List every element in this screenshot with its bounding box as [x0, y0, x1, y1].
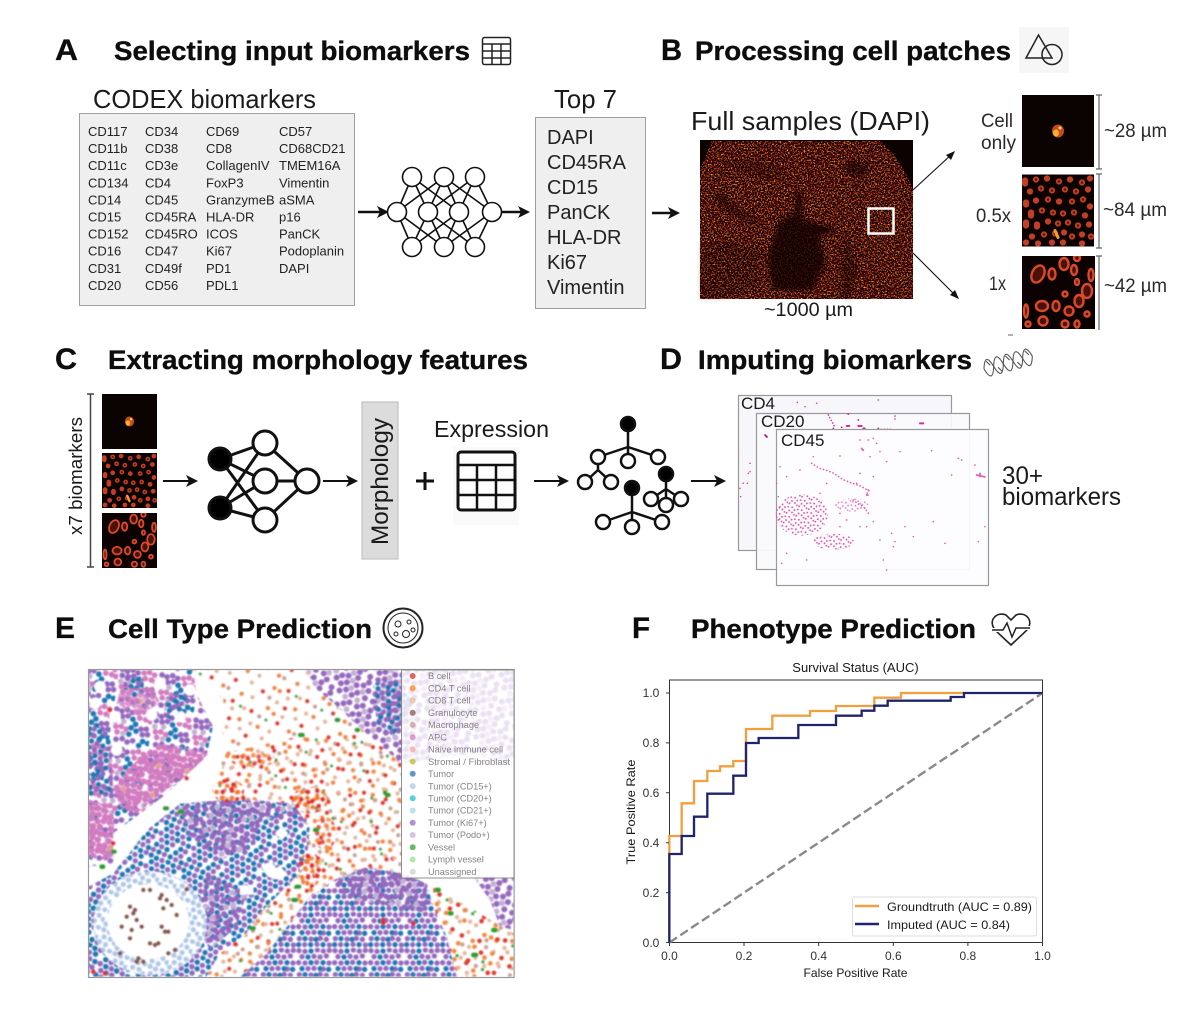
label 30+ biomarkers: biomarkers	[1002, 483, 1121, 511]
zoom arrow down	[913, 253, 959, 299]
label cell only	[981, 111, 1016, 154]
label x7 biomarkers: x7 biomarkers	[66, 417, 86, 535]
cell type legend: Tumor	[428, 769, 454, 779]
cell type legend: Naive immune cell	[428, 745, 503, 755]
panel B: processing cell patches	[661, 27, 1167, 335]
scale label 1000 um: ~1000 µm	[764, 300, 853, 321]
Top 7 biomarker list box: CD45RA	[547, 152, 627, 174]
icon: neural network	[388, 168, 502, 256]
CODEX biomarker list box: GranzymeB	[206, 192, 275, 207]
diagonal reference line	[670, 693, 1042, 942]
CODEX biomarker list box: CD68CD21	[279, 141, 345, 156]
CODEX biomarker list box: CD4	[145, 175, 171, 190]
heading E: Cell Type Prediction	[108, 614, 372, 644]
Top 7 biomarker list box: Vimentin	[547, 277, 624, 299]
arrow to imputed maps	[691, 475, 726, 487]
Top 7 title: Top 7	[554, 84, 617, 114]
morphology box	[362, 402, 398, 559]
CODEX biomarkers title: CODEX biomarkers	[93, 84, 316, 114]
map layer CD4: CD4	[741, 394, 775, 413]
CODEX biomarker list box: CD69	[206, 124, 239, 139]
x axis ticks and labels: 0.6	[885, 949, 902, 963]
CODEX biomarker list box: CD34	[145, 124, 178, 139]
cell type legend	[402, 670, 514, 878]
panel letter A: A	[55, 34, 78, 67]
CODEX biomarker list box: CD152	[88, 227, 128, 242]
cell type legend: Tumor (Podo+)	[428, 830, 490, 840]
cell type legend: Tumor (CD20+)	[428, 794, 492, 804]
scale brackets	[1096, 95, 1102, 330]
scale label 42 um: ~42 µm	[1104, 276, 1167, 297]
CODEX biomarker list box: HLA-DR	[206, 210, 254, 224]
CODEX biomarker list box	[80, 114, 354, 306]
chart legend: Imputed (AUC = 0.84)	[887, 918, 1010, 932]
CODEX biomarker list box: CD49f	[145, 261, 182, 276]
icon: DNA helix	[982, 348, 1034, 377]
x axis ticks and labels: 1.0	[1034, 949, 1051, 963]
CODEX biomarker list box: PD1	[206, 261, 231, 276]
heading A: Selecting input biomarkers	[114, 36, 470, 66]
map layer CD20: CD20	[761, 412, 804, 431]
CODEX biomarker list box: CD20	[88, 278, 121, 293]
CODEX biomarker list box: CD14	[88, 192, 121, 207]
x axis ticks and labels: 0.0	[661, 949, 678, 963]
CODEX biomarker list box: Vimentin	[279, 175, 329, 190]
Top 7 biomarker list box: CD15	[547, 177, 598, 199]
morphology box: Morphology	[367, 418, 394, 545]
CODEX biomarker list box: Ki67	[206, 244, 232, 259]
y axis ticks and labels: 0.4	[643, 836, 660, 850]
Top 7 biomarker list box: PanCK	[547, 202, 611, 224]
arrow to panel B	[652, 207, 680, 219]
arrow to network	[163, 475, 198, 487]
y axis ticks and labels: 0.8	[643, 736, 660, 750]
x axis ticks and labels: 0.4	[810, 949, 827, 963]
panel A: selecting input biomarkers	[55, 34, 680, 308]
cell type legend: Tumor (CD21+)	[428, 806, 492, 816]
panel letter D: D	[660, 343, 682, 376]
heading B: Processing cell patches	[695, 36, 1011, 66]
bracket	[87, 394, 94, 567]
x axis ticks and labels: 0.8	[960, 949, 977, 963]
x axis ticks and labels	[661, 943, 1051, 963]
cell type legend: Vessel	[428, 842, 455, 852]
icon: table	[482, 38, 511, 65]
cell type legend: Tumor (CD15+)	[428, 781, 492, 791]
chart legend: Groundtruth (AUC = 0.89)	[887, 900, 1032, 914]
CODEX biomarker list box: CD8	[206, 141, 232, 156]
y axis ticks and labels: 1.0	[643, 686, 660, 700]
cell type legend: Stromal / Fibroblast	[428, 757, 510, 767]
label cell only: only	[981, 133, 1016, 154]
imputed ROC curve	[669, 693, 1043, 942]
CODEX biomarker list box: CD117	[88, 124, 128, 139]
icon: shapes	[1019, 27, 1069, 73]
CODEX biomarker list box: aSMA	[279, 192, 315, 207]
heading F: Phenotype Prediction	[691, 614, 976, 644]
heading C: Extracting morphology features	[108, 345, 528, 375]
label 1x: 1x	[989, 274, 1006, 295]
patch: 1x	[1022, 256, 1095, 329]
x axis ticks and labels: 0.2	[736, 949, 753, 963]
map layer CD45: CD45	[781, 431, 824, 450]
arrow to trees	[534, 475, 569, 487]
CODEX biomarker list box: p16	[279, 210, 301, 224]
cell type legend: Tumor (Ki67+)	[428, 818, 487, 828]
CODEX biomarker list box: CD15	[88, 210, 121, 224]
cell type legend: CD8 T cell	[428, 696, 471, 706]
cell type legend: Granulocyte	[428, 708, 478, 718]
cell type legend: B cell	[428, 671, 450, 681]
CODEX biomarker list box: TMEM16A	[279, 158, 341, 173]
Top 7 biomarker list box: DAPI	[547, 127, 594, 149]
y axis ticks and labels: 0.0	[643, 936, 660, 950]
CODEX biomarker list box: CD31	[88, 261, 121, 276]
CODEX biomarker list box: CD38	[145, 141, 178, 156]
Full samples title: Full samples (DAPI)	[691, 106, 930, 136]
scale label 28 um: ~28 µm	[1104, 121, 1167, 142]
panel F: phenotype prediction	[624, 612, 1051, 980]
patch: cell only	[1022, 95, 1094, 167]
CODEX biomarker list box: CD57	[279, 124, 312, 139]
cell type legend: APC	[428, 732, 447, 742]
map layer CD45	[776, 430, 988, 586]
CODEX biomarker list box: CD16	[88, 244, 121, 259]
icon: expression table	[453, 447, 519, 525]
CODEX biomarker list box: CD45RA	[145, 210, 197, 224]
map layer CD20	[756, 412, 970, 570]
icon: heart with pulse	[992, 614, 1030, 645]
chart title: Survival Status (AUC)	[792, 660, 919, 675]
CODEX biomarker list box: CD11c	[88, 158, 127, 173]
label 30+ biomarkers	[1002, 462, 1121, 511]
panel letter B: B	[661, 34, 682, 67]
icon: decision tree forest	[578, 417, 688, 534]
CODEX biomarker list box: CD134	[88, 175, 128, 190]
scale label 84 um: ~84 µm	[1103, 200, 1167, 221]
scatter plot of cell types	[88, 669, 514, 977]
CODEX biomarker list box: CD11b	[88, 141, 128, 156]
Expression label: Expression	[434, 416, 549, 442]
cell type legend: CD4 T cell	[428, 683, 471, 693]
panel D: imputing biomarkers	[660, 343, 1121, 586]
CODEX biomarker list box: PanCK	[279, 227, 321, 242]
cell type legend: Lymph vessel	[428, 855, 484, 865]
patch: 0.5x	[1022, 174, 1094, 247]
heading D: Imputing biomarkers	[698, 345, 972, 375]
ROC chart	[624, 660, 1051, 980]
CODEX biomarker list box: CD56	[145, 278, 178, 293]
CODEX biomarker list box: CollagenIV	[206, 158, 270, 173]
Top 7 biomarker list box: HLA-DR	[547, 227, 621, 249]
panel letter E: E	[55, 612, 75, 645]
groundtruth ROC curve	[669, 693, 963, 942]
chart legend	[852, 897, 1036, 936]
cell type legend: Unassigned	[428, 867, 477, 877]
plot frame	[670, 680, 1042, 942]
CODEX biomarker list box: ICOS	[206, 227, 238, 242]
panel letter C: C	[55, 343, 77, 376]
label 30+ biomarkers: 30+	[1002, 462, 1043, 490]
DAPI tissue image	[700, 140, 913, 299]
patch stack	[102, 394, 157, 568]
CODEX biomarker list box: CD45	[145, 192, 178, 207]
icon: petri dish	[384, 608, 422, 648]
CODEX biomarker list box: FoxP3	[206, 175, 244, 190]
icon: small neural network	[209, 431, 319, 532]
plus sign	[416, 472, 434, 490]
y axis title: True Positive Rate	[624, 759, 638, 864]
CODEX biomarker list box: PDL1	[206, 278, 239, 293]
x axis title: False Positive Rate	[804, 966, 908, 980]
zoom arrow up	[913, 151, 955, 190]
panel E: cell type prediction	[55, 608, 514, 977]
CODEX biomarker list box: DAPI	[279, 261, 309, 276]
y axis ticks and labels	[643, 686, 669, 950]
CODEX biomarker list box: CD47	[145, 244, 178, 259]
CODEX biomarker list box: Podoplanin	[279, 244, 344, 259]
panel C: extracting morphology features	[55, 343, 726, 568]
Top 7 biomarker list box	[536, 118, 646, 308]
Top 7 biomarker list box: Ki67	[547, 252, 587, 274]
panel letter F: F	[632, 612, 650, 645]
cell type legend: Macrophage	[428, 720, 479, 730]
map layer CD4	[738, 394, 952, 550]
arrow out of network	[501, 206, 530, 218]
arrow to morphology	[323, 475, 358, 487]
CODEX biomarker list box: CD45RO	[145, 227, 198, 242]
y axis ticks and labels: 0.2	[643, 886, 660, 900]
label 0.5x: 0.5x	[976, 206, 1011, 227]
CODEX biomarker list box: CD3e	[145, 158, 178, 173]
label cell only: Cell	[981, 111, 1013, 132]
arrow into network	[358, 206, 389, 218]
y axis ticks and labels: 0.6	[643, 786, 660, 800]
